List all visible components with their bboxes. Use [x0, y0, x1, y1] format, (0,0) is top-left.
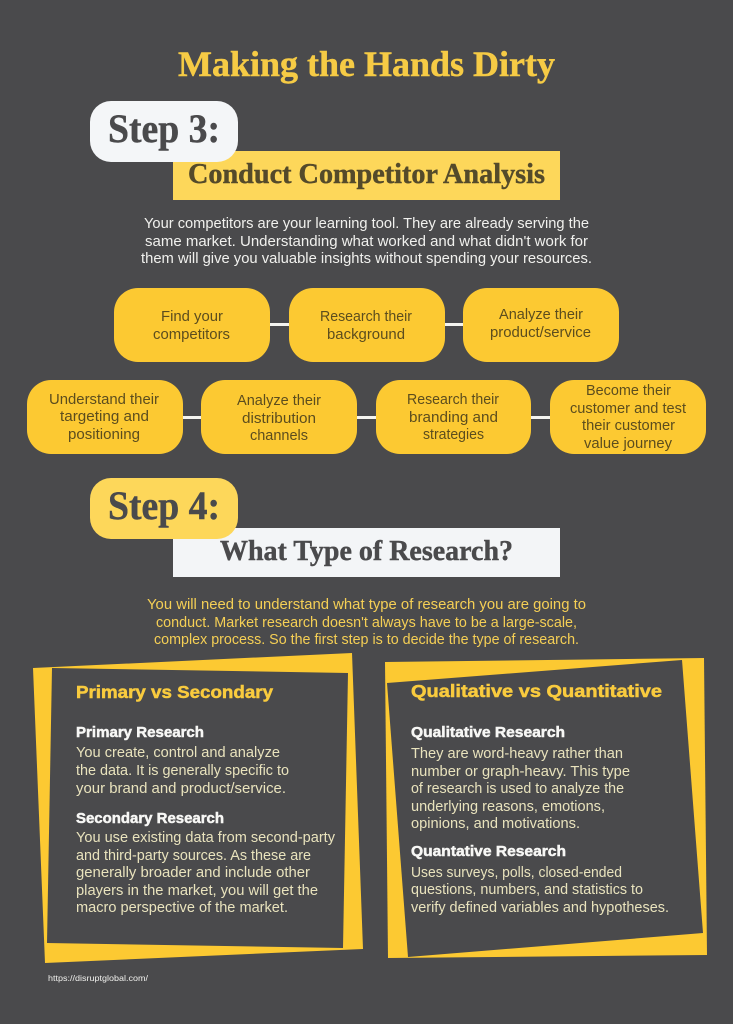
step 3 intro text [141, 216, 592, 267]
secondary research body: You use existing data from second-party [76, 830, 336, 846]
step: research their branding: strategies [423, 427, 484, 443]
primary research body: the data. It is generally specific to [76, 763, 289, 779]
qualitative research body: opinions, and motivations. [411, 816, 580, 832]
step: research their branding [376, 380, 531, 454]
step 3 intro text: Your competitors are your learning tool. They are already serving the [144, 216, 589, 232]
panel heading: Qualitative vs Quantitative [411, 681, 662, 701]
step: find your competitors: competitors [153, 327, 230, 343]
banner: what type of research [173, 528, 560, 577]
secondary research body [76, 830, 336, 916]
title: Making the Hands Dirty [178, 44, 555, 84]
source url: https://disruptglobal.com/ [48, 973, 149, 983]
quantative research subheading: Quantative Research [411, 844, 566, 860]
connectors row 1 [268, 323, 467, 326]
step 3 pill: Step 3: [108, 106, 220, 151]
step: find your competitors: Find your [161, 309, 223, 325]
panel heading: Primary vs Secondary [76, 682, 273, 702]
step: research their branding: Research their [407, 392, 499, 408]
secondary research body: generally broader and include other [76, 865, 310, 881]
primary research body [76, 745, 289, 797]
secondary research body: players in the market, you will get the [76, 883, 318, 899]
panel: qualitative vs quantitative [385, 658, 707, 958]
step: analyze their distribution channels: Analyze their [237, 393, 321, 409]
step: become their customer: their customer [582, 418, 675, 434]
step: analyze their product/service: product/service [490, 325, 591, 341]
step: analyze their distribution channels: channels [250, 428, 308, 444]
step: research their background: Research their [320, 309, 412, 325]
secondary research body: macro perspective of the market. [76, 900, 288, 916]
step 4 intro text: complex process. So the first step is to decide the type of research. [154, 632, 579, 648]
qualitative research body: underlying reasons, emotions, [411, 799, 605, 815]
step: become their customer: value journey [584, 436, 673, 452]
step 4 pill [90, 478, 238, 539]
step: analyze their product/service: Analyze their [499, 307, 583, 323]
step: analyze their distribution channels: distribution [242, 411, 316, 427]
quantative research body [411, 865, 669, 916]
banner: conduct competitor analysis: Conduct Competitor Analysis [188, 158, 545, 190]
step: analyze their product/service [463, 288, 619, 362]
step 4 intro text [147, 597, 586, 648]
primary research body: your brand and product/service. [76, 781, 286, 797]
connectors row 2 [181, 416, 553, 419]
qualitative research subheading: Qualitative Research [411, 725, 565, 741]
banner: what type of research: What Type of Research? [220, 535, 513, 567]
step: research their branding: branding and [409, 410, 498, 426]
primary research body: You create, control and analyze [76, 745, 280, 761]
banner: conduct competitor analysis [173, 151, 560, 200]
quantative research body: Uses surveys, polls, closed-ended [411, 865, 622, 881]
qualitative research body: number or graph-heavy. This type [411, 764, 630, 780]
step 3 intro text: them will give you valuable insights without spending your resources. [141, 251, 592, 267]
step: find your competitors [114, 288, 270, 362]
step: understand their targeting [27, 380, 183, 454]
step: understand their targeting: targeting and [60, 409, 149, 425]
qualitative research body: They are word-heavy rather than [411, 746, 623, 762]
step 3 pill [90, 101, 238, 162]
step 4 pill: Step 4: [108, 483, 220, 528]
step: research their background [289, 288, 445, 362]
step: analyze their distribution channels [201, 380, 357, 454]
quantative research body: verify defined variables and hypotheses. [411, 900, 669, 916]
step: research their background: background [327, 327, 405, 343]
qualitative research body: of research is used to analyze the [411, 781, 624, 797]
step: become their customer: customer and test [570, 401, 686, 417]
primary research subheading: Primary Research [76, 725, 204, 741]
step: understand their targeting: positioning [68, 427, 140, 443]
secondary research body: and third-party sources. As these are [76, 848, 311, 864]
step 4 intro text: You will need to understand what type of research you are going to [147, 597, 586, 613]
secondary research subheading: Secondary Research [76, 811, 224, 827]
step 3 intro text: same market. Understanding what worked and what didn't work for [145, 234, 588, 250]
step: become their customer [550, 380, 706, 454]
qualitative research body [411, 746, 630, 832]
panel: primary vs secondary [33, 653, 363, 963]
step: understand their targeting: Understand their [49, 392, 159, 408]
step 4 intro text: conduct. Market research doesn't always have to be a large-scale, [156, 615, 577, 631]
step: become their customer: Become their [586, 383, 671, 399]
quantative research body: questions, numbers, and statistics to [411, 882, 643, 898]
